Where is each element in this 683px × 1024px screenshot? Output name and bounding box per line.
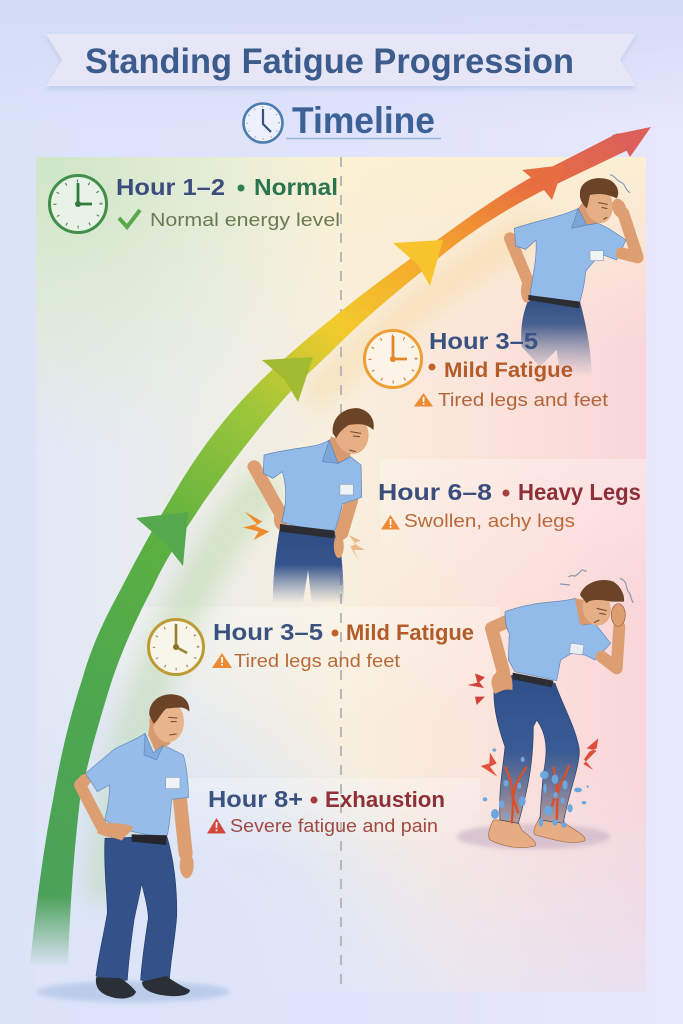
timeline panel background <box>36 157 646 992</box>
status: exhaustion: Exhaustion <box>325 787 445 812</box>
belt <box>132 834 167 845</box>
name badge <box>166 777 180 789</box>
center dashed line <box>340 157 342 985</box>
arrowhead: yellow <box>393 240 443 286</box>
water droplets <box>483 748 589 828</box>
icon: gold clock <box>148 620 204 674</box>
icon: orange clock <box>364 330 422 388</box>
arrowhead: red tip <box>612 127 651 157</box>
status: heavy legs: Heavy Legs <box>518 479 641 505</box>
icon: warning triangle <box>381 515 400 530</box>
heading: hour 3-5: Hour 3–5 <box>213 619 323 645</box>
hand on hip <box>97 823 133 841</box>
description: swollen legs: Swollen, achy legs <box>404 511 575 531</box>
arrowhead: orange <box>522 165 564 200</box>
description: severe fatigue: Severe fatigue and pain <box>230 816 438 836</box>
left arm <box>492 622 507 672</box>
row: hour 1-2 normal <box>50 174 340 232</box>
row: hour 8+ exhaustion <box>207 786 445 836</box>
head <box>575 598 597 625</box>
boots <box>96 977 136 999</box>
shirt <box>86 733 189 835</box>
icon: pale pain bolt <box>349 535 365 562</box>
right arm <box>180 800 186 853</box>
title text: Standing Fatigue Progression <box>85 42 574 81</box>
feet <box>489 820 536 848</box>
description: normal energy: Normal energy level <box>150 210 340 230</box>
description: tired legs: Tired legs and feet <box>438 390 608 410</box>
shirt <box>505 598 611 681</box>
icon: green clock <box>50 176 106 232</box>
left arm <box>80 780 102 827</box>
figure: man top right holding head <box>510 175 638 377</box>
status: mild fatigue: Mild Fatigue <box>346 620 474 645</box>
description: tired legs: Tired legs and feet <box>234 651 400 671</box>
jeans <box>96 836 177 983</box>
icon: timeline clock <box>244 104 282 142</box>
figure: man middle holding hips <box>243 408 374 603</box>
figure: man standing bottom left <box>37 694 230 1002</box>
title ribbon <box>46 34 636 89</box>
arrowhead: green <box>136 512 188 566</box>
pain bolts <box>467 673 485 705</box>
heading: hour 8+: Hour 8+ <box>208 786 303 812</box>
icon: orange pain bolt <box>243 512 269 540</box>
right arm <box>602 627 619 668</box>
heading: hour 1-2: Hour 1–2 <box>116 174 225 200</box>
stress squiggles <box>560 570 633 603</box>
timeline heading <box>244 100 441 142</box>
heading: hour 3-5: Hour 3–5 <box>429 328 538 354</box>
row: hour 3-5 mild fatigue upper <box>364 328 608 410</box>
icon: check mark <box>119 210 140 227</box>
arrowhead: yellow-green <box>262 357 313 402</box>
floor shadow <box>457 824 610 849</box>
floor shadow <box>37 981 230 1002</box>
row: hour 6-8 heavy legs <box>378 479 641 531</box>
timeline text: Timeline <box>292 100 435 141</box>
status: normal: Normal <box>254 174 338 200</box>
icon: warning triangle <box>212 653 232 668</box>
icon: warning triangle <box>414 393 433 406</box>
row: hour 3-5 mild fatigue lower <box>148 619 474 674</box>
red veins <box>505 765 569 823</box>
figure: man exhausted with swollen legs <box>457 570 633 849</box>
head <box>148 717 171 753</box>
jeans <box>494 675 579 823</box>
icon: warning triangle <box>207 818 226 834</box>
heading: hour 6-8: Hour 6–8 <box>378 479 492 505</box>
status: mild fatigue: Mild Fatigue <box>444 359 573 382</box>
progress arrow <box>24 127 651 967</box>
